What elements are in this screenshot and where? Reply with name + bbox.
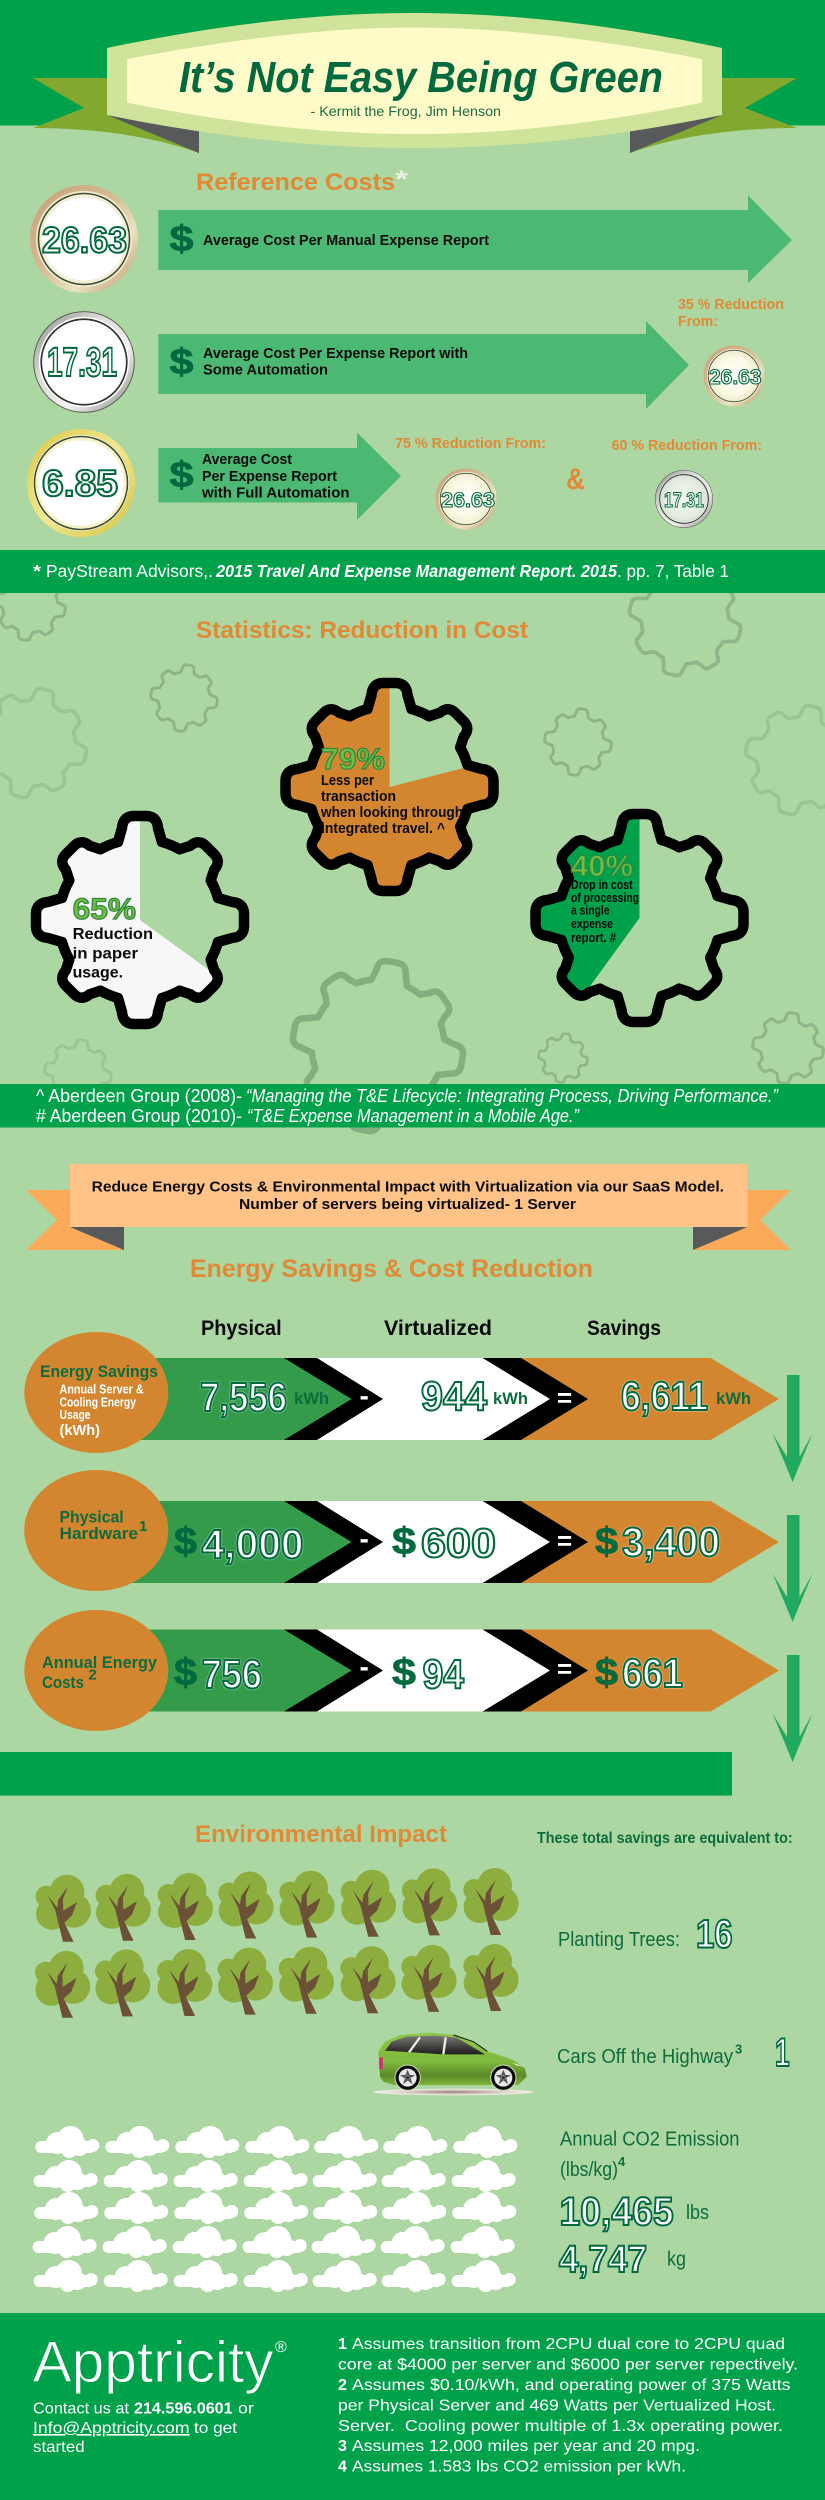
values: 94 [423, 1651, 464, 1697]
label: Average Cost Per Expense Report with [203, 346, 468, 362]
some automation row [34, 296, 784, 412]
row label oval: Annual Server & [60, 1383, 144, 1397]
planting trees stat: Planting Trees: [558, 1929, 680, 1951]
title banner [33, 13, 797, 153]
values: - [360, 1523, 369, 1554]
row label oval: Costs [42, 1673, 84, 1692]
gear chart: 79% per transaction: integrated travel. ^ [321, 821, 446, 837]
row label oval: 1 [139, 1518, 147, 1535]
values: 6,611 [621, 1373, 708, 1419]
gear chart: 79% per transaction: when looking through [320, 805, 463, 821]
heading: reference costs: Reference Costs [196, 169, 395, 196]
column headings [201, 1317, 661, 1340]
arrow [158, 321, 689, 409]
row label oval: Annual Energy [42, 1653, 158, 1672]
row label oval [24, 1470, 168, 1591]
contact text: to get [194, 2420, 238, 2437]
CO2 emission stat: (lbs/kg) [560, 2159, 618, 2181]
values: 944 [421, 1373, 487, 1419]
footnotes: 1 [338, 2336, 347, 2353]
values [174, 1650, 683, 1697]
label: Per Expense Report [202, 469, 337, 485]
footnotes: Assumes 12,000 miles per year and 20 mpg. [352, 2438, 700, 2455]
coin 17.31: 17.31 [47, 339, 117, 385]
banner text: Reduce Energy Costs & Environmental Impact with Virtualization via our SaaS Model. [92, 1178, 724, 1196]
logo: Apptricity: ® [275, 2339, 287, 2356]
source band: PayStream: . pp. 7, Table 1 [617, 561, 729, 581]
row label oval [24, 1332, 168, 1453]
cars off highway stat: Cars Off the Highway [557, 2046, 733, 2068]
coin 26.63: 26.63 [42, 220, 127, 260]
dollar icon: $ [170, 454, 194, 495]
values: $ [174, 1652, 197, 1694]
row label oval: Usage [60, 1408, 91, 1422]
banner plate [70, 1164, 747, 1227]
column headings: Virtualized [384, 1317, 492, 1340]
row label oval: 2 [88, 1666, 97, 1684]
label [203, 346, 468, 378]
gear chart: 40% cost drop: a single [571, 904, 610, 918]
CO2 emission stat: kg [667, 2248, 686, 2270]
arrow [158, 432, 401, 520]
banner text: Number of servers being virtualized- 1 Server [239, 1196, 576, 1213]
gear chart: 79% per transaction [280, 678, 499, 896]
gear chart: 40% cost drop: expense [571, 917, 613, 931]
row label oval: Physical [60, 1508, 124, 1526]
row label oval: (kWh) [60, 1422, 100, 1439]
panel: statistics [36, 617, 769, 1048]
column headings: Physical [201, 1317, 282, 1340]
dollar icon: $ [170, 341, 194, 382]
values [200, 1373, 751, 1420]
down arrows [773, 1375, 813, 1762]
source band: PayStream: * [33, 561, 41, 581]
footnotes [338, 2336, 798, 2476]
row: energy usage [24, 1332, 779, 1453]
gear chart: 65% paper usage: 65% [73, 893, 136, 926]
row: annual energy costs [24, 1610, 779, 1731]
gear chart: 40% cost drop: 40% [571, 850, 633, 883]
values: 7,556 [200, 1374, 287, 1420]
source band: Aberdeen [0, 1084, 825, 1128]
coin 6.85: 6.85 [42, 463, 118, 504]
reduction callout 60%: 17.31 [664, 489, 704, 512]
chevron bar [130, 1501, 779, 1583]
gear chart: 65% paper usage [30, 810, 250, 1030]
values: = [557, 1526, 572, 1556]
ribbon tails [26, 1190, 791, 1250]
label: Average Cost Per Manual Expense Report [203, 233, 489, 249]
gear chart: 65% paper usage: Reduction [73, 926, 153, 943]
gear chart: 65% paper usage: usage. [73, 964, 123, 982]
coin 26.63 [33, 188, 135, 290]
heading: environmental impact: Environmental Impact [195, 1821, 447, 1848]
values: 756 [202, 1651, 262, 1697]
footnotes: Assumes transition from 2CPU dual core to 2CPU quad [352, 2336, 785, 2353]
footnotes: Assumes 1.583 lbs CO2 emission per kWh. [352, 2459, 686, 2476]
gear chart: 79% per transaction: 79% [321, 743, 385, 776]
gear chart: 40% cost drop [530, 808, 749, 1028]
footnotes: 2 [338, 2377, 347, 2394]
row label oval [24, 1610, 168, 1731]
row: physical hardware [24, 1470, 779, 1591]
heading: energy savings: Energy Savings & Cost Reduction [190, 1255, 593, 1283]
values: $ [174, 1521, 197, 1563]
reduction callout 35%: 35 % Reduction [678, 296, 784, 313]
values: kWh [294, 1389, 329, 1408]
contact text: 214.596.0601 [134, 2401, 233, 2418]
values: = [557, 1383, 572, 1413]
values: 4,000 [202, 1521, 304, 1567]
gear chart: 79% per transaction: Less per [321, 773, 374, 789]
values: kWh [493, 1389, 528, 1408]
dollar icon: $ [170, 218, 194, 259]
reduction callout 75% [395, 435, 546, 528]
label [201, 452, 350, 502]
column headings: Savings [587, 1317, 661, 1340]
contact text [33, 2401, 254, 2456]
footnotes: Server. Cooling power multiple of 1.3x operating power. [338, 2418, 783, 2435]
contact text: or [238, 2401, 254, 2418]
reduction callout 60% [612, 437, 762, 528]
chevron bar [130, 1358, 779, 1440]
planting trees stat [558, 1913, 733, 1957]
chevron bar [130, 1630, 779, 1712]
quote attribution: - Kermit the Frog, Jim Henson [310, 103, 501, 119]
row label oval: Hardware [60, 1524, 138, 1543]
values: $ [595, 1521, 618, 1563]
reduction callout 35% [678, 296, 784, 405]
panel: energy savings [24, 1255, 813, 1762]
source band: PayStream [0, 550, 825, 593]
equivalence caption: These total savings are equivalent to: [537, 1830, 793, 1847]
CO2 emission stat: 10,465 [560, 2190, 674, 2234]
values: $ [392, 1652, 416, 1694]
cars off highway stat [557, 2031, 790, 2075]
reduction callout 75%: 75 % Reduction From: [395, 435, 546, 452]
values: $ [392, 1521, 416, 1563]
row label oval: Energy Savings [40, 1362, 158, 1381]
label: with Full Automation [201, 486, 350, 502]
green divider bar [0, 1752, 732, 1796]
cars off highway stat: 1 [775, 2031, 790, 2075]
reduction callout 60%: 60 % Reduction From: [612, 437, 762, 454]
contact text: Info@Apptricity.com [33, 2420, 190, 2437]
coin 17.31 [34, 312, 134, 412]
values: - [360, 1651, 369, 1682]
heading: statistics: Statistics: Reduction in Cost [196, 617, 528, 644]
label: Some Automation [203, 362, 328, 378]
values: 3,400 [622, 1519, 720, 1565]
values [174, 1519, 720, 1567]
values: 600 [421, 1520, 496, 1566]
footnotes: 4 [338, 2459, 347, 2476]
ribbon tails [33, 78, 797, 153]
CO2 emission stat [559, 2128, 740, 2281]
values: = [557, 1654, 572, 1684]
gear chart: 79% per transaction: transaction [321, 789, 396, 805]
source band: Aberdeen: “Managing the T&E Lifecycle: Integrating Process, Driving Performance.” [246, 1086, 779, 1106]
logo: Apptricity: Apptricity [33, 2330, 274, 2395]
title: It’s Not Easy Being Green [179, 53, 663, 102]
footnotes: 3 [338, 2438, 347, 2455]
CO2 emission stat: lbs [686, 2202, 709, 2224]
virtualization banner [26, 1164, 791, 1250]
footer panel [0, 2313, 825, 2500]
planting trees stat: 16 [696, 1913, 733, 1957]
gear chart: 40% cost drop: Drop in cost [571, 878, 633, 892]
background gears [0, 552, 825, 1145]
icon: car [373, 2033, 533, 2095]
gear chart: 40% cost drop: report. # [571, 931, 616, 945]
contact text: Contact us at [33, 2401, 130, 2418]
CO2 emission stat: 4 [618, 2154, 626, 2169]
source band: Aberdeen: “T&E Expense Management in a Mobile Age.” [247, 1106, 580, 1126]
contact text: started [33, 2439, 85, 2456]
banner text [92, 1178, 724, 1213]
CO2 emission stat: 4,747 [559, 2239, 647, 2281]
row label oval: Cooling Energy [60, 1396, 136, 1410]
cars off highway stat: 3 [735, 2042, 742, 2057]
source band: PayStream: 2015 Travel And Expense Management Report. 2015 [215, 561, 617, 581]
banner plate [107, 13, 722, 148]
full automation row [30, 432, 762, 534]
heading: reference costs: * [395, 166, 409, 193]
label: Average Cost [202, 452, 292, 468]
gear chart: 65% paper usage: in paper [73, 946, 138, 963]
gear chart: 40% cost drop: of processing [571, 891, 639, 905]
manual report row [33, 188, 792, 290]
CO2 emission stat: Annual CO2 Emission [560, 2128, 740, 2150]
panel: reference costs [30, 166, 792, 534]
values: - [360, 1380, 369, 1411]
source band: Aberdeen: # Aberdeen Group (2010)- [36, 1106, 242, 1126]
footnotes: per Physical Server and 469 Watts per Vertualized Host. [338, 2398, 776, 2414]
values: $ [595, 1652, 618, 1694]
values: kWh [716, 1389, 751, 1408]
arrow [158, 196, 792, 283]
reduction callout 75%: 26.63 [441, 489, 495, 512]
reduction callout 35%: 26.63 [709, 366, 762, 389]
header band [0, 0, 825, 126]
source band: PayStream: PayStream Advisors,. [46, 561, 213, 581]
footnotes: core at $4000 per server and $6000 per server repectively. [338, 2357, 798, 2374]
source band: Aberdeen: ^ Aberdeen Group (2008)- [36, 1086, 242, 1106]
coin 6.85 [30, 432, 132, 534]
tree icons [35, 1868, 519, 2018]
ampersand: & [566, 463, 585, 496]
values: 661 [622, 1650, 683, 1696]
reduction callout 35%: From: [678, 313, 718, 330]
cloud icons [33, 2126, 517, 2292]
footnotes: Assumes $0.10/kWh, and operating power of 375 Watts [352, 2377, 790, 2394]
panel: environmental impact [33, 1821, 793, 2292]
